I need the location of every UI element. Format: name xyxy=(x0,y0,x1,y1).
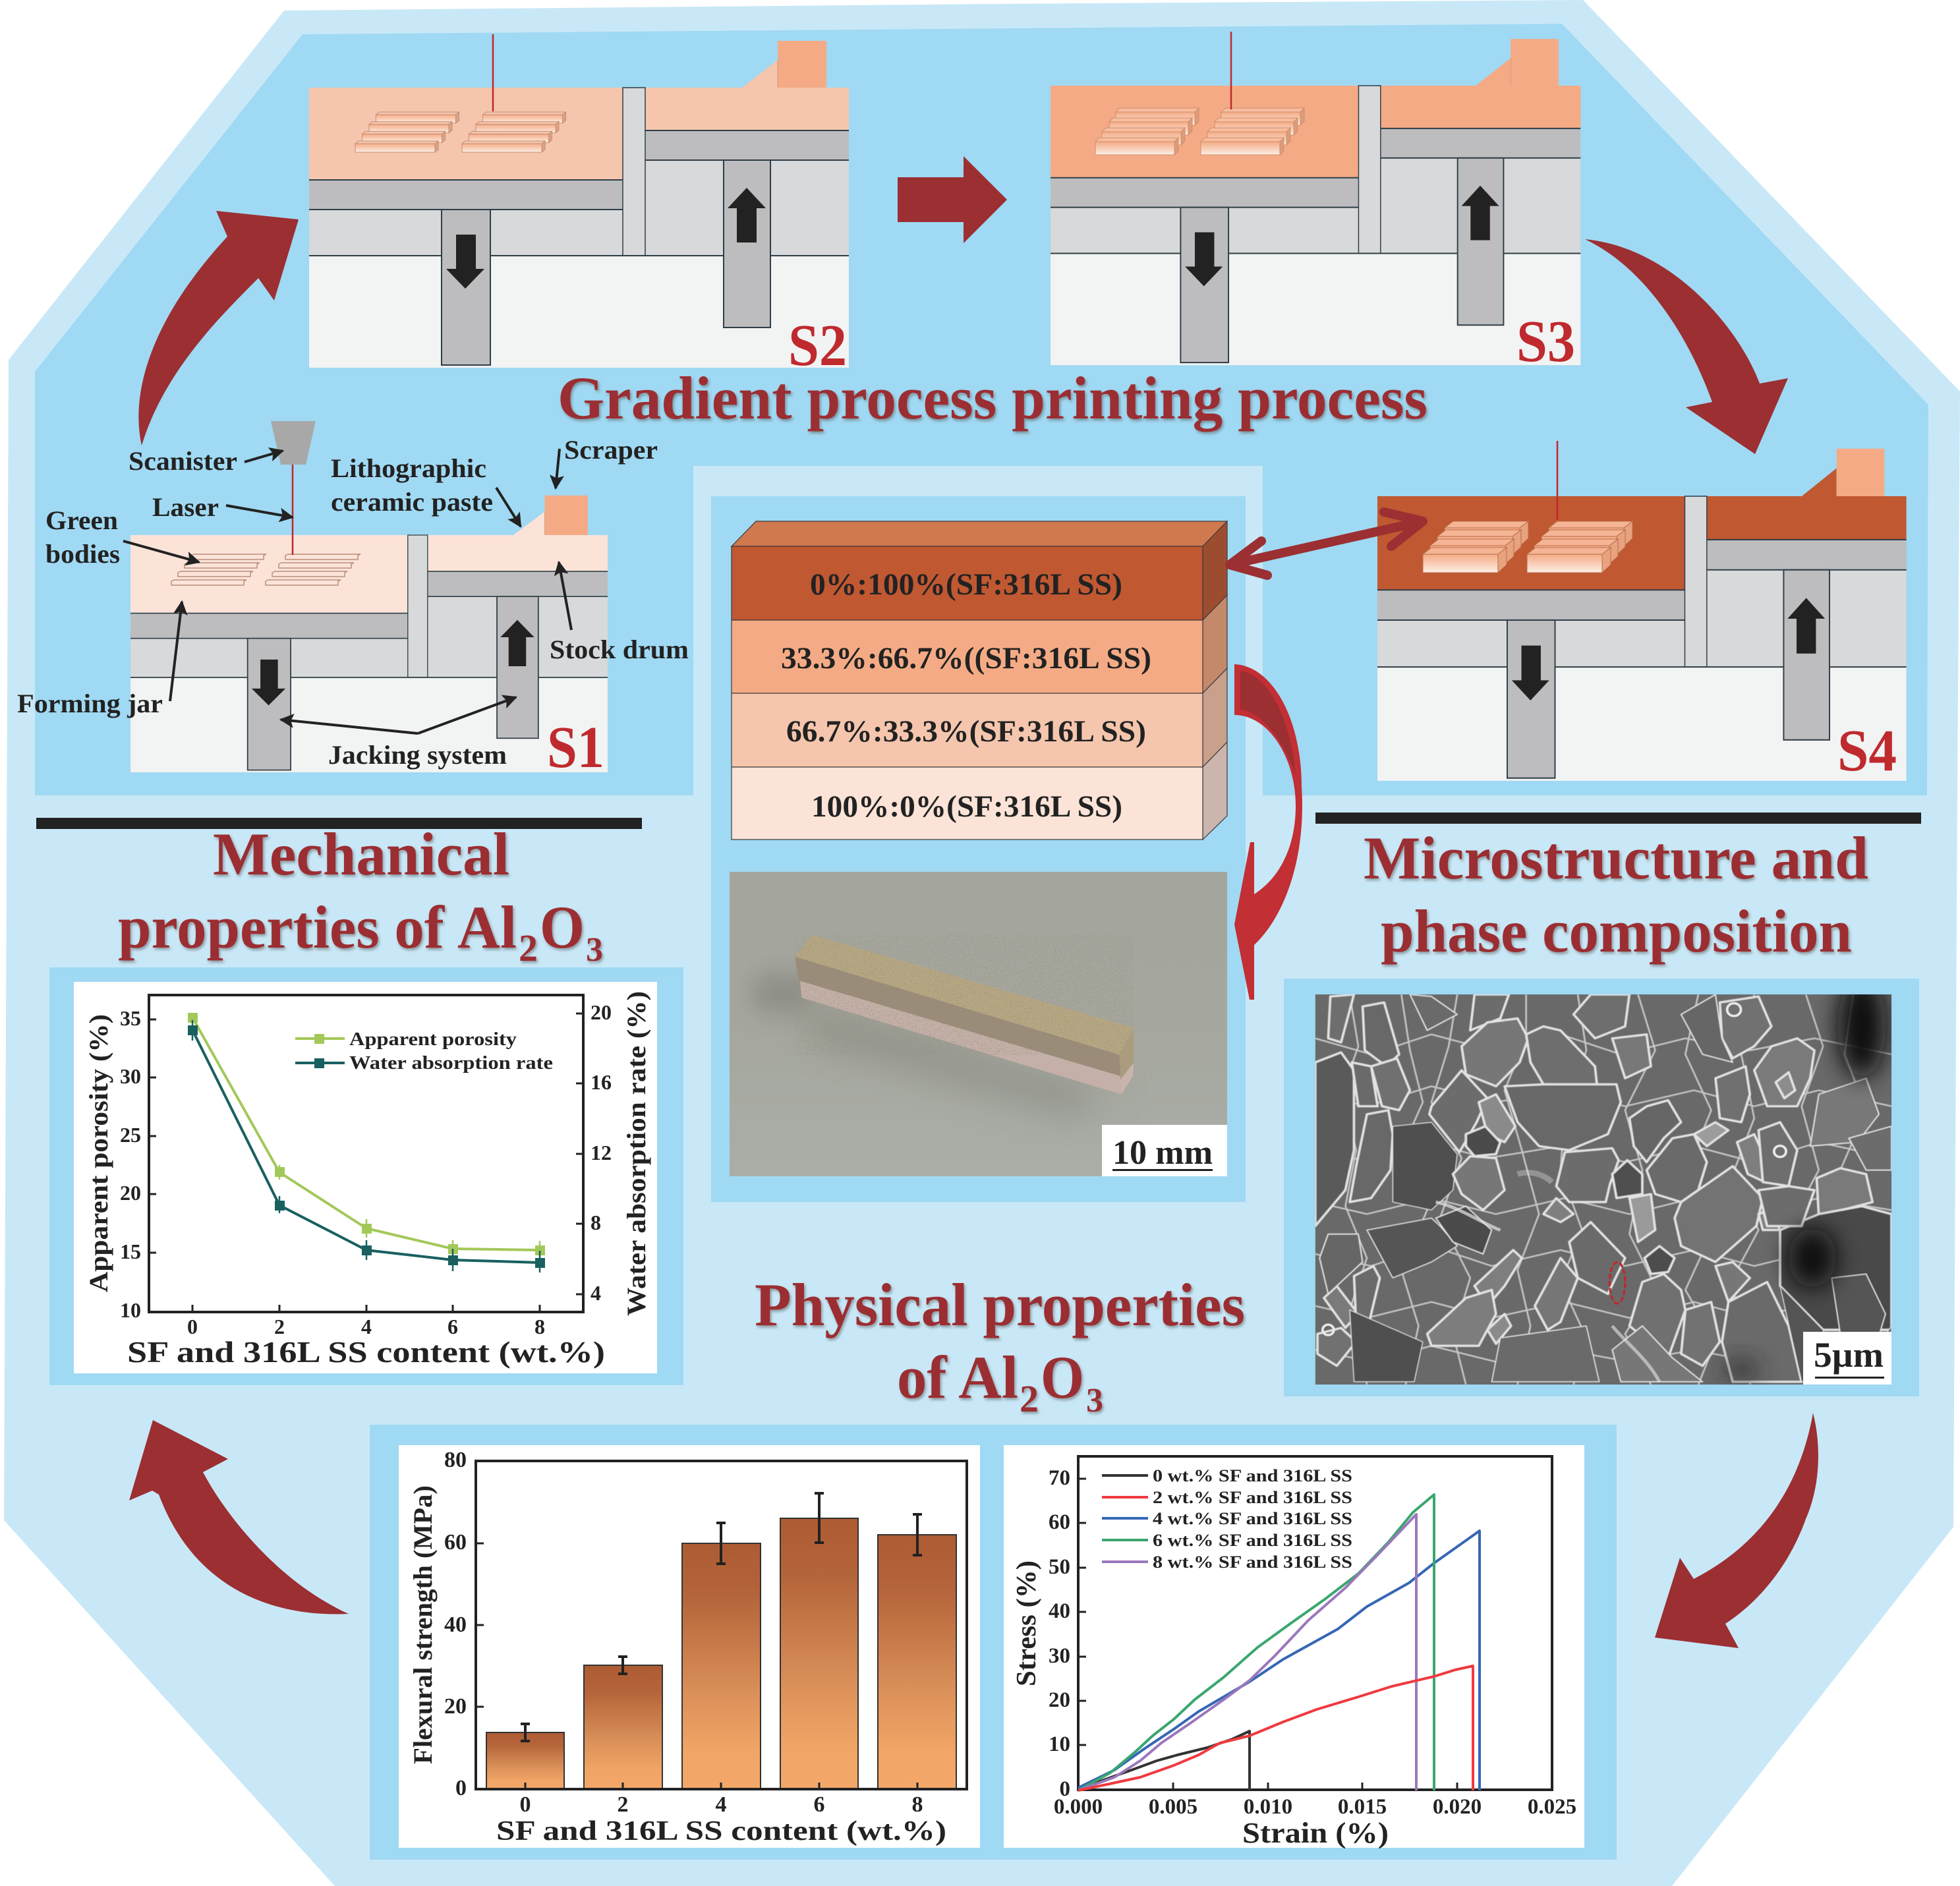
panel: SEM micrograph: 5µm xyxy=(1814,1335,1884,1375)
panel: S1 printer stage with labels: bodies xyxy=(45,539,120,569)
chart: stress-strain curves: 40 xyxy=(1049,1599,1070,1623)
heading: mechanical properties xyxy=(118,820,603,969)
panel: S3 printer stage xyxy=(1051,32,1580,374)
legend: 8 wt.% SF and 316L SS xyxy=(1153,1553,1352,1572)
legend: 2 wt.% SF and 316L SS xyxy=(1153,1488,1352,1507)
heading: mechanical properties: 2 xyxy=(519,927,538,969)
panel: central layer stack and sample photo: 33.3%:66.7%((SF:316L SS) xyxy=(781,641,1151,675)
panel: S1 printer stage with labels: Jacking system xyxy=(328,740,507,770)
heading: mechanical properties: Al xyxy=(457,894,517,961)
panel: S1 printer stage with labels: S1 xyxy=(547,715,604,780)
chart: flexural strength bars: 20 xyxy=(444,1694,467,1719)
arrow: S1 to S2 xyxy=(138,211,299,445)
chart: porosity and water absorption: 6 xyxy=(447,1315,458,1338)
chart: stress-strain curves: 60 xyxy=(1049,1510,1070,1534)
panel: S1 printer stage with labels: ceramic paste xyxy=(331,487,493,517)
chart: stress-strain curves: 0 xyxy=(1060,1777,1070,1801)
chart: flexural strength bars: 8 xyxy=(912,1792,923,1817)
chart: porosity and water absorption: Apparent porosity (%) xyxy=(84,1014,113,1292)
chart: stress-strain curves: 0.010 xyxy=(1244,1795,1292,1819)
panel: S1 printer stage with labels: Scanister xyxy=(129,446,237,476)
heading: physical properties: Physical properties xyxy=(755,1271,1245,1338)
panel: S1 printer stage with labels xyxy=(17,421,689,780)
heading: physical properties: 3 xyxy=(1086,1382,1103,1419)
chart: porosity and water absorption xyxy=(49,967,683,1385)
chart: porosity and water absorption: 20 xyxy=(120,1181,141,1205)
legend: 4 wt.% SF and 316L SS xyxy=(1153,1509,1352,1528)
heading: physical properties: O xyxy=(1041,1344,1084,1411)
panel: S1 printer stage with labels: Stock drum xyxy=(550,635,689,664)
chart: stress-strain curves: 30 xyxy=(1049,1644,1070,1668)
chart: porosity and water absorption: 16 xyxy=(591,1070,612,1094)
heading: physical properties: of Al xyxy=(897,1344,1018,1411)
chart: flexural strength bars: 0 xyxy=(455,1776,467,1800)
chart: stress-strain curves: 50 xyxy=(1049,1555,1070,1579)
heading: mechanical properties: 3 xyxy=(586,931,603,969)
panel: S1 printer stage with labels: Forming jar xyxy=(17,689,163,718)
panel: bottom charts background xyxy=(370,1425,1617,1860)
chart: porosity and water absorption: 30 xyxy=(120,1064,141,1088)
chart: flexural strength bars: 4 xyxy=(716,1792,726,1817)
panel: gradient process printing (inner blue octagon) xyxy=(35,24,1928,795)
chart: stress-strain curves: Strain (%) xyxy=(1242,1817,1389,1849)
chart: porosity and water absorption: 10 xyxy=(120,1298,141,1322)
chart: flexural strength bars: 40 xyxy=(444,1613,467,1637)
panel: central layer stack and sample photo xyxy=(711,496,1246,1202)
chart: porosity and water absorption: 8 xyxy=(591,1211,601,1234)
legend: Water absorption rate xyxy=(349,1053,553,1073)
divider bar: mechanical xyxy=(36,818,642,829)
chart: stress-strain curves: 0.000 xyxy=(1054,1795,1103,1819)
chart: porosity and water absorption: 35 xyxy=(120,1006,141,1030)
chart: flexural strength bars: 6 xyxy=(813,1792,825,1817)
chart: stress-strain curves: 70 xyxy=(1049,1466,1070,1490)
heading: mechanical properties: O xyxy=(540,894,585,961)
heading: mechanical properties: properties of xyxy=(118,894,445,961)
chart: porosity and water absorption: Water absorption rate (%) xyxy=(621,991,651,1316)
chart: porosity and water absorption: 25 xyxy=(120,1123,141,1147)
photo of printed sample: 10 mm xyxy=(1112,1134,1213,1172)
chart: porosity and water absorption: 4 xyxy=(361,1315,372,1338)
heading: physical properties: 2 xyxy=(1020,1377,1039,1420)
chart: porosity and water absorption: 4 xyxy=(591,1281,601,1305)
chart: stress-strain curves: 0.005 xyxy=(1149,1795,1197,1819)
chart: stress-strain curves: 10 xyxy=(1049,1732,1070,1756)
chart: porosity and water absorption: 12 xyxy=(591,1141,612,1164)
chart: stress-strain curves: 0.020 xyxy=(1433,1795,1482,1819)
heading: mechanical properties: Mechanical xyxy=(213,820,509,888)
chart: porosity and water absorption: 0 xyxy=(187,1315,198,1338)
series: water absorption rate xyxy=(188,1020,545,1272)
chart: stress-strain curves: 0.025 xyxy=(1528,1795,1576,1819)
photo of printed sample xyxy=(730,872,1227,1176)
chart: porosity and water absorption: SF and 316L SS content (wt.%) xyxy=(127,1335,605,1369)
chart: flexural strength bars: 60 xyxy=(444,1530,467,1555)
layered gradient stack xyxy=(732,521,1227,840)
panel: S4 printer stage xyxy=(1377,441,1907,784)
arrow: double-headed between stack and S4 xyxy=(1230,512,1423,575)
arrow: SEM to stress-strain chart xyxy=(1655,1413,1818,1648)
panel: S2 printer stage: S2 xyxy=(788,313,847,378)
arrow: S3 to S4 xyxy=(1585,239,1788,454)
legend: Apparent porosity xyxy=(349,1029,517,1050)
heading: microstructure and phase composition: Microstructure and xyxy=(1364,824,1868,892)
panel: central layer stack and sample photo: 0%:100%(SF:316L SS) xyxy=(810,567,1122,602)
panel: S2 printer stage xyxy=(309,34,849,378)
legend: 6 wt.% SF and 316L SS xyxy=(1153,1531,1352,1550)
panel: SEM micrograph xyxy=(1284,975,1919,1396)
chart: stress-strain curves: 0.015 xyxy=(1338,1795,1387,1819)
legend: 0 wt.% SF and 316L SS xyxy=(1153,1466,1352,1485)
chart: porosity and water absorption: 15 xyxy=(120,1240,141,1263)
chart: flexural strength bars: SF and 316L SS content (wt.%) xyxy=(496,1816,946,1846)
panel: S1 printer stage with labels: Green xyxy=(45,505,118,535)
title: gradient process printing process: Gradient process printing process xyxy=(558,364,1427,432)
heading: microstructure and phase composition: phase composition xyxy=(1381,898,1852,965)
panel: S3 printer stage: S3 xyxy=(1516,309,1575,374)
chart: flexural strength bars xyxy=(399,1445,980,1848)
arrow: flexural chart to porosity chart xyxy=(129,1420,349,1614)
series: apparent porosity xyxy=(188,1013,545,1259)
panel: S1 printer stage with labels: Scraper xyxy=(564,435,658,465)
chart: stress-strain curves: Stress (%) xyxy=(1012,1560,1042,1686)
divider bar: microstructure xyxy=(1315,813,1921,824)
heading: microstructure and phase composition xyxy=(1364,824,1868,965)
legend xyxy=(1102,1466,1352,1572)
panel: central layer stack and sample photo: 100%:0%(SF:316L SS) xyxy=(811,789,1122,824)
panel: S1 printer stage with labels: Lithographic xyxy=(331,453,486,483)
arrow: S2 to S3 xyxy=(898,156,1007,243)
panel: S4 printer stage: S4 xyxy=(1837,718,1897,784)
curves xyxy=(1078,1495,1480,1790)
chart: flexural strength bars: 80 xyxy=(444,1448,467,1472)
panel: S1 printer stage with labels: Laser xyxy=(152,492,219,522)
chart: flexural strength bars: 0 xyxy=(519,1792,531,1817)
chart: porosity and water absorption: 8 xyxy=(534,1315,545,1338)
chart: flexural strength bars: 2 xyxy=(617,1792,629,1817)
arrow: stack to sample photo xyxy=(1234,664,1302,1000)
chart: stress-strain curves xyxy=(1004,1445,1584,1849)
legend xyxy=(295,1029,553,1073)
chart: porosity and water absorption: 20 xyxy=(591,1000,612,1024)
chart: flexural strength bars: Flexural strength (MPa) xyxy=(408,1485,438,1764)
panel: central layer stack and sample photo: 66.7%:33.3%(SF:316L SS) xyxy=(786,714,1146,749)
chart: porosity and water absorption: 2 xyxy=(274,1315,285,1338)
heading: physical properties xyxy=(755,1271,1245,1420)
chart: stress-strain curves: 20 xyxy=(1049,1688,1070,1712)
